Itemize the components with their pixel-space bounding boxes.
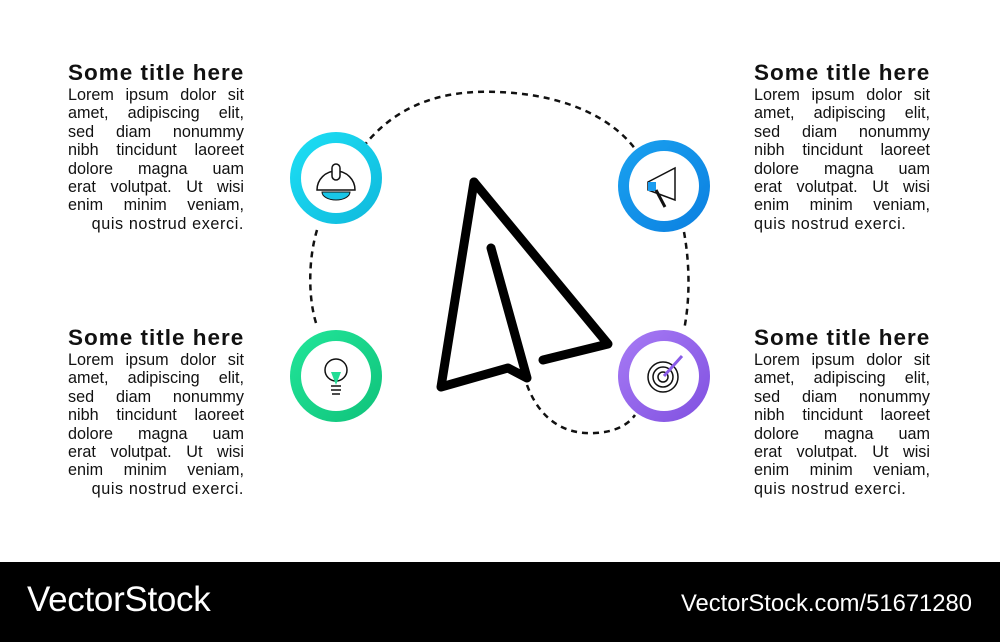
text block: bottom left: nibh tincidunt laoreet	[68, 406, 244, 424]
text block: top left: Some title here	[68, 60, 244, 85]
text block: bottom right: enim minim veniam,	[754, 461, 930, 479]
text block: top right: erat volutpat. Ut wisi	[754, 178, 930, 196]
text block: top right	[754, 60, 930, 233]
text block: bottom right: sed diam nonummy	[754, 388, 930, 406]
arrow	[441, 182, 608, 387]
text block: top left: dolore magna uam	[68, 160, 244, 178]
text block: top left: erat volutpat. Ut wisi	[68, 178, 244, 196]
text block: top right: nibh tincidunt laoreet	[754, 141, 930, 159]
text block: top right: amet, adipiscing elit,	[754, 104, 930, 122]
text block: bottom left: Lorem ipsum dolor sit	[68, 351, 244, 369]
text block: bottom right: quis nostrud exerci.	[754, 480, 906, 498]
icon circle: target	[618, 330, 710, 422]
text block: top right: sed diam nonummy	[754, 123, 930, 141]
text block: top left: quis nostrud exerci.	[92, 215, 244, 233]
text block: bottom left: enim minim veniam,	[68, 461, 244, 479]
text block: top right: enim minim veniam,	[754, 196, 930, 214]
text block: top left: sed diam nonummy	[68, 123, 244, 141]
text block: bottom left: amet, adipiscing elit,	[68, 369, 244, 387]
text block: top right: dolore magna uam	[754, 160, 930, 178]
text block: bottom left: erat volutpat. Ut wisi	[68, 443, 244, 461]
text block: top left: amet, adipiscing elit,	[68, 104, 244, 122]
text block: top left	[68, 60, 244, 233]
text block: bottom right: nibh tincidunt laoreet	[754, 406, 930, 424]
footer bar	[0, 562, 1000, 642]
text block: bottom left	[68, 325, 244, 498]
text block: bottom left: sed diam nonummy	[68, 388, 244, 406]
text block: top right: Some title here	[754, 60, 930, 85]
text block: bottom left: dolore magna uam	[68, 425, 244, 443]
icon circle: helmet	[290, 132, 382, 224]
text block: bottom right: Some title here	[754, 325, 930, 350]
text block: bottom right: Lorem ipsum dolor sit	[754, 351, 930, 369]
text block: top left: enim minim veniam,	[68, 196, 244, 214]
text block: top left: Lorem ipsum dolor sit	[68, 86, 244, 104]
text block: top right: quis nostrud exerci.	[754, 215, 906, 233]
text block: bottom left: Some title here	[68, 325, 244, 350]
text block: bottom left: quis nostrud exerci.	[92, 480, 244, 498]
text block: top left: nibh tincidunt laoreet	[68, 141, 244, 159]
text block: top right: Lorem ipsum dolor sit	[754, 86, 930, 104]
icon circle: bulb	[290, 330, 382, 422]
footer bar: VectorStock	[27, 580, 210, 619]
text block: bottom right: amet, adipiscing elit,	[754, 369, 930, 387]
icon circle: megaphone	[618, 140, 710, 232]
text block: bottom right: dolore magna uam	[754, 425, 930, 443]
dashed path	[310, 92, 688, 433]
text block: bottom right	[754, 325, 930, 498]
text block: bottom right: erat volutpat. Ut wisi	[754, 443, 930, 461]
footer bar: VectorStock.com/51671280	[681, 590, 972, 617]
